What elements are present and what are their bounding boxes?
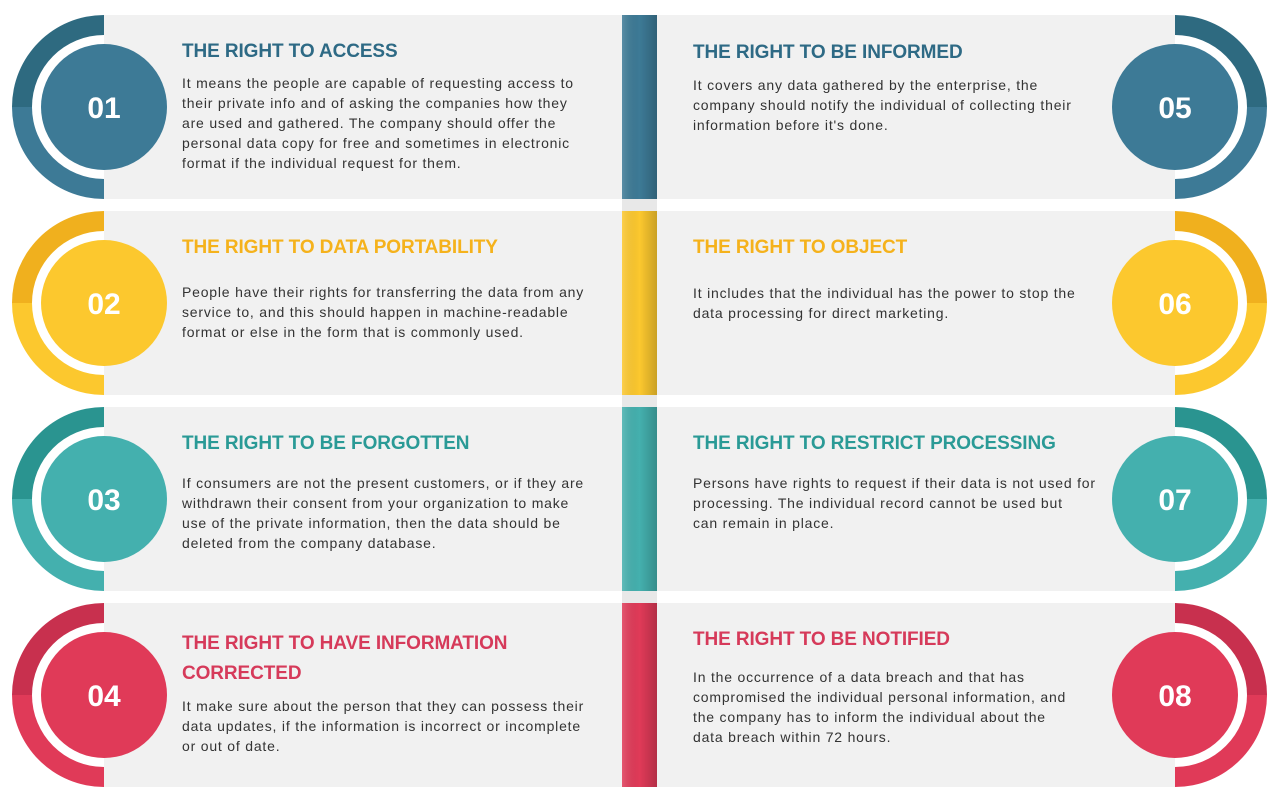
text 01	[182, 75, 574, 171]
text 05	[693, 77, 1072, 133]
center bar	[622, 15, 657, 787]
heading 02: THE RIGHT TO DATA PORTABILITY	[182, 237, 498, 258]
text 06: It includes that the individual has the power to stop the	[693, 285, 1076, 301]
heading 05: THE RIGHT TO BE INFORMED	[693, 42, 963, 63]
circle 02	[12, 211, 167, 395]
text 08: compromised the individual personal information, and	[693, 689, 1066, 705]
text 08	[693, 669, 1066, 745]
circle 08	[1112, 603, 1267, 787]
circle 03: 03	[87, 484, 121, 517]
text 01: their private info and of asking the companies how they	[182, 95, 568, 111]
text 06	[693, 285, 1076, 321]
text 07: Persons have rights to request if their data is not used for	[693, 475, 1096, 491]
text 08: In the occurrence of a data breach and that has	[693, 669, 1025, 685]
text 03: withdrawn their consent from your organization to make	[182, 495, 569, 511]
text 01: are used and gathered. The company should offer the	[182, 115, 556, 131]
text 01: personal data copy for free and sometimes in electronic	[182, 135, 570, 151]
text 07	[693, 475, 1096, 531]
text 02: format or else in the form that is commonly used.	[182, 324, 524, 340]
circle 01: 01	[87, 92, 121, 125]
circle 06: 06	[1158, 288, 1192, 321]
text 05: information before it's done.	[693, 117, 889, 133]
heading 08: THE RIGHT TO BE NOTIFIED	[693, 629, 950, 650]
circle 08: 08	[1158, 680, 1192, 713]
text 04: data updates, if the information is incorrect or incomplete	[182, 718, 581, 734]
circle 03	[12, 407, 167, 591]
text 02: People have their rights for transferring the data from any	[182, 284, 584, 300]
text 05: company should notify the individual of collecting their	[693, 97, 1072, 113]
text 08: data breach within 72 hours.	[693, 729, 891, 745]
text 03: If consumers are not the present customers, or if they are	[182, 475, 584, 491]
text 04: or out of date.	[182, 738, 280, 754]
heading 03: THE RIGHT TO BE FORGOTTEN	[182, 433, 469, 454]
circle 07: 07	[1158, 484, 1192, 517]
text 07: processing. The individual record cannot be used but	[693, 495, 1063, 511]
circle 05: 05	[1158, 92, 1192, 125]
text 08: the company has to inform the individual about the	[693, 709, 1046, 725]
text 06: data processing for direct marketing.	[693, 305, 949, 321]
circle 07	[1112, 407, 1267, 591]
circle 04: 04	[87, 680, 121, 713]
text 01: It means the people are capable of requesting access to	[182, 75, 574, 91]
text 01: format if the individual request for them.	[182, 155, 462, 171]
text 02	[182, 284, 584, 340]
circle 04	[12, 603, 167, 787]
heading 01: THE RIGHT TO ACCESS	[182, 41, 398, 62]
text 03: deleted from the company database.	[182, 535, 436, 551]
text 05: It covers any data gathered by the enterprise, the	[693, 77, 1038, 93]
text 07: can remain in place.	[693, 515, 834, 531]
heading 07: THE RIGHT TO RESTRICT PROCESSING	[693, 433, 1056, 454]
text 04: It make sure about the person that they can possess their	[182, 698, 584, 714]
text 03	[182, 475, 584, 551]
text 03: use of the private information, then the data should be	[182, 515, 561, 531]
circle 02: 02	[87, 288, 121, 321]
circle 01	[12, 15, 167, 199]
heading 04: THE RIGHT TO HAVE INFORMATION CORRECTED	[182, 633, 507, 684]
text 02: service to, and this should happen in machine-readable	[182, 304, 568, 320]
text 04	[182, 698, 584, 754]
heading 06: THE RIGHT TO OBJECT	[693, 237, 907, 258]
circle 06	[1112, 211, 1267, 395]
circle 05	[1112, 15, 1267, 199]
